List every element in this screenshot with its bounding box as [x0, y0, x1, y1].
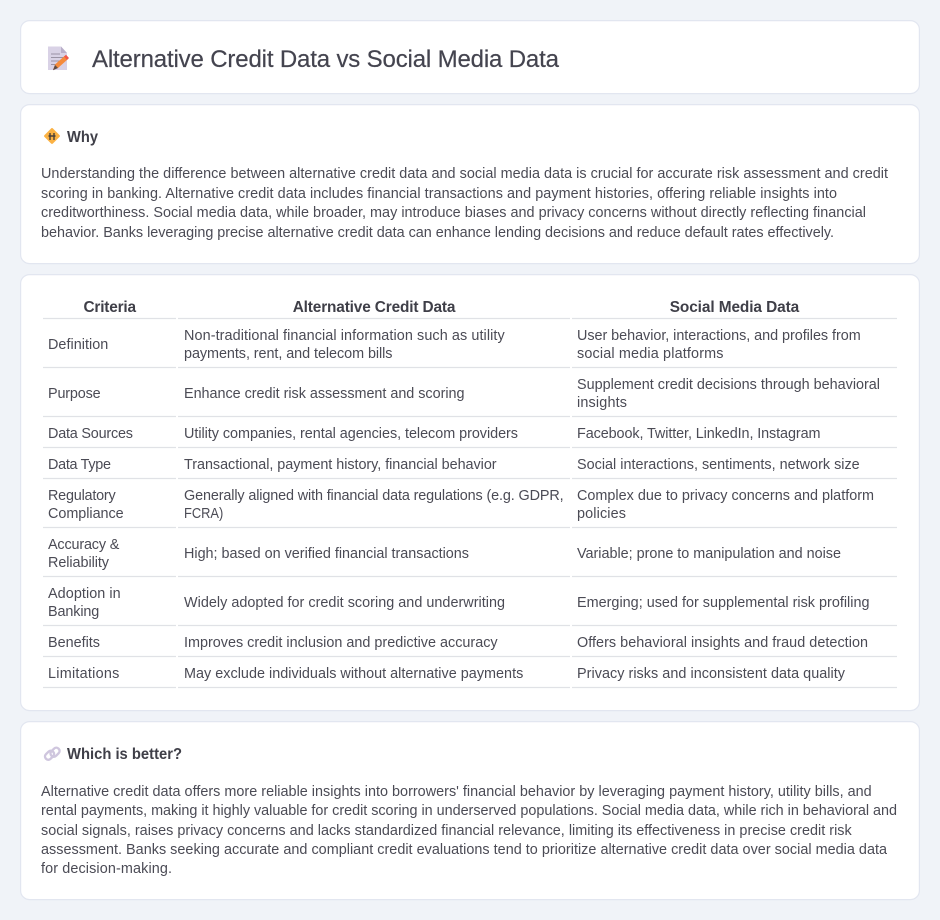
row: accuracy and reliability — [43, 537, 897, 576]
row: limitations: Privacy risks and inconsistent data quality — [577, 666, 846, 682]
table header row: Social Media Data — [670, 299, 800, 316]
row: regulatory compliance — [43, 488, 897, 528]
row: accuracy and reliability: Variable; prone to manipulation and noise — [577, 546, 841, 562]
heading: which is better: Which is better? — [67, 746, 182, 763]
row: regulatory compliance: FCRA) — [184, 506, 223, 522]
row: definition — [43, 328, 897, 368]
row: accuracy and reliability: Accuracy & — [48, 537, 120, 553]
text block: why: creditworthiness. Social media data, while broader, may introduce biases and privacy concerns without directly reflecting financial — [41, 205, 866, 221]
row: purpose: insights — [577, 395, 627, 411]
row: adoption in banking — [43, 586, 897, 626]
row: purpose: Enhance credit risk assessment and scoring — [184, 386, 464, 402]
row: adoption in banking: Widely adopted for credit scoring and underwriting — [184, 595, 505, 611]
row: purpose — [43, 377, 897, 416]
row: benefits: Offers behavioral insights and fraud detection — [577, 635, 868, 651]
row: definition: social media platforms — [577, 346, 724, 362]
row: benefits — [43, 635, 897, 656]
row: regulatory compliance: Complex due to privacy concerns and platform — [577, 488, 874, 504]
table header row: Criteria — [84, 299, 136, 316]
row: adoption in banking: Banking — [48, 604, 99, 620]
text block: which is better: assessment. Banks seeking accurate and compliant credit evaluations tend to prioritize alternative credit data over social media data — [41, 842, 887, 858]
row: data sources: Utility companies, rental agencies, telecom providers — [184, 426, 518, 442]
row: data type — [43, 457, 897, 478]
title: Alternative Credit Data vs Social Media Data — [92, 46, 560, 73]
table header row — [43, 299, 897, 318]
text block: which is better: rental payments, making it highly valuable for credit scoring in underserved populations. Social media data, while rich in behavioral and — [41, 803, 897, 819]
header panel — [21, 21, 919, 94]
text block: which is better: social signals, raises privacy concerns and lacks standardized financial relevance, limiting its effectiveness in precise credit risk — [41, 823, 852, 839]
text block: why: scoring in banking. Alternative credit data includes financial transactions and payment histories, offering reliable insights into — [41, 186, 837, 202]
row: data type: Data Type — [48, 457, 111, 473]
icon: warning diamond — [44, 128, 60, 144]
text block: which is better: for decision-making. — [41, 861, 172, 877]
row: data sources: Facebook, Twitter, LinkedIn, Instagram — [577, 426, 820, 442]
table header row: Alternative Credit Data — [293, 299, 456, 316]
row: adoption in banking: Emerging; used for supplemental risk profiling — [577, 595, 870, 611]
row: regulatory compliance: policies — [577, 506, 626, 522]
text block: which is better — [41, 784, 897, 877]
row: purpose: Supplement credit decisions through behavioral — [577, 377, 880, 393]
row: limitations: May exclude individuals without alternative payments — [184, 666, 523, 682]
heading: why: Why — [67, 129, 98, 146]
row: definition: User behavior, interactions, and profiles from — [577, 328, 861, 344]
row: accuracy and reliability: High; based on verified financial transactions — [184, 546, 469, 562]
row: purpose: Purpose — [48, 386, 101, 402]
row: data sources — [43, 426, 897, 448]
row: limitations: Limitations — [48, 666, 119, 682]
panel: why — [21, 105, 919, 264]
icon: memo with pencil — [48, 46, 69, 70]
row: definition: Non-traditional financial information such as utility — [184, 328, 505, 344]
row: benefits: Benefits — [48, 635, 100, 651]
row: data type: Transactional, payment history, financial behavior — [184, 457, 497, 473]
row: limitations — [43, 666, 897, 688]
text block: why: Understanding the difference between alternative credit data and social media data is crucial for accurate risk assessment and credit — [41, 166, 888, 182]
row: regulatory compliance: Compliance — [48, 506, 124, 522]
panel: comparison table — [21, 275, 919, 711]
row: data type: Social interactions, sentiments, network size — [577, 457, 860, 473]
row: accuracy and reliability: Reliability — [48, 555, 110, 571]
icon: chain link — [44, 746, 61, 761]
text block: why — [41, 166, 888, 241]
text block: why: behavior. Banks leveraging precise alternative credit data can enhance lending decisions and reduce default rates effectively. — [41, 225, 834, 241]
row: benefits: Improves credit inclusion and predictive accuracy — [184, 635, 498, 651]
row: data sources: Data Sources — [48, 426, 133, 442]
row: definition: payments, rent, and telecom bills — [184, 346, 392, 362]
row: adoption in banking: Adoption in — [48, 586, 121, 602]
row: regulatory compliance: Generally aligned with financial data regulations (e.g. GDPR, — [184, 488, 564, 504]
row: regulatory compliance: Regulatory — [48, 488, 116, 504]
panel: which is better — [21, 722, 919, 900]
row: definition: Definition — [48, 337, 108, 353]
text block: which is better: Alternative credit data offers more reliable insights into borrowers' financial behavior by leveraging payment history, utility bills, and — [41, 784, 872, 800]
